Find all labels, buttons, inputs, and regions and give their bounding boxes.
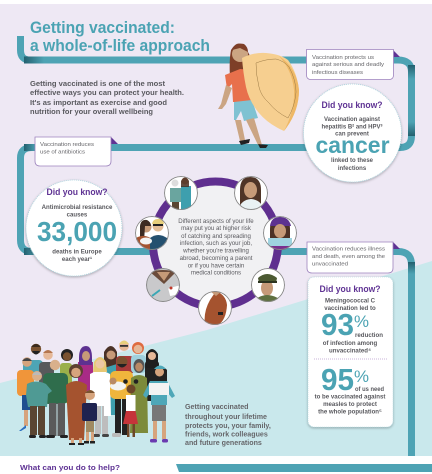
stat: 95%: of us need bbox=[355, 386, 384, 393]
closing text: protects you, your family, bbox=[185, 422, 271, 430]
did you know: cancer bbox=[304, 84, 402, 182]
ring text: medical conditions bbox=[191, 270, 241, 276]
title bbox=[30, 19, 210, 55]
did you know: 33,000: deaths in Europe bbox=[52, 248, 102, 256]
back row bbox=[23, 340, 159, 415]
stat: 95%: measles to protect bbox=[323, 401, 377, 408]
ring text: or if you have certain bbox=[188, 262, 244, 270]
ring of life stages bbox=[135, 176, 297, 326]
portrait: traveller bbox=[263, 216, 297, 252]
intro text: effective ways you can protect your health. bbox=[30, 88, 184, 97]
intro text bbox=[30, 79, 184, 116]
portrait: carer and older person bbox=[164, 176, 198, 212]
did you know: 33,000: causes bbox=[67, 212, 88, 218]
did you know card: Did you know? bbox=[320, 284, 381, 294]
ring text: may put you at higher risk bbox=[181, 225, 252, 232]
ring text: Different aspects of your life bbox=[178, 218, 254, 225]
callout: illness: Vaccination reduces illness bbox=[312, 246, 385, 252]
portrait: patient with medical card bbox=[146, 268, 181, 302]
did you know: 33,000: 33,000 bbox=[37, 216, 117, 247]
did you know card: vaccination led to bbox=[324, 305, 376, 312]
did you know: cancer: infections bbox=[338, 166, 367, 172]
stat: 93% bbox=[321, 307, 383, 354]
portrait: pregnant woman bbox=[198, 291, 232, 326]
stat: 95%: % bbox=[354, 367, 369, 386]
closing text: and future generations bbox=[185, 439, 262, 447]
title: Getting vaccinated: bbox=[30, 19, 175, 37]
callout: illness: unvaccinated bbox=[312, 262, 348, 268]
stat: 95%: the whole population⁵ bbox=[318, 408, 382, 416]
did you know: cancer: hepatitis B² and HPV³ bbox=[321, 124, 383, 130]
callout: protects: infectious diseases bbox=[312, 70, 363, 76]
stat: 95% bbox=[315, 362, 385, 416]
illustration: woman with shield bbox=[218, 43, 299, 148]
did you know: cancer: Vaccination against bbox=[324, 117, 380, 123]
stat: 95%: to be vaccinated against bbox=[315, 394, 385, 400]
did you know: 33,000: Did you know? bbox=[46, 187, 108, 197]
did you know: 33,000: Antimicrobial resistance bbox=[42, 204, 113, 211]
closing text bbox=[185, 403, 271, 447]
intro text: It's as important as exercise and good bbox=[30, 98, 167, 107]
portrait: soldier bbox=[251, 268, 285, 303]
did you know: cancer: Did you know? bbox=[322, 100, 383, 110]
intro text: Getting vaccinated is one of the most bbox=[30, 79, 166, 88]
ring text: of catching and spreading bbox=[181, 233, 251, 240]
did you know: cancer: linked to these bbox=[331, 158, 374, 164]
closing text: throughout your lifetime bbox=[185, 413, 267, 421]
closing text: friends, work colleagues bbox=[185, 430, 268, 438]
ring text: abroad, becoming a parent bbox=[180, 255, 253, 262]
stat: 93%: % bbox=[354, 312, 369, 331]
did you know card bbox=[308, 277, 393, 427]
did you know: 33,000 bbox=[26, 180, 122, 276]
ring text bbox=[178, 218, 254, 276]
icon: shield bbox=[242, 53, 299, 131]
title: a whole-of-life approach bbox=[30, 37, 210, 55]
portrait: doctor bbox=[234, 176, 268, 211]
did you know: cancer: can prevent bbox=[335, 132, 369, 138]
stat: 93%: of infection among bbox=[323, 340, 378, 347]
illustration: crowd of people bbox=[17, 340, 175, 445]
ring text: infection, such as your job, bbox=[180, 240, 252, 247]
callout: protects: against serious and deadly bbox=[312, 62, 384, 68]
callout: antibiotics bbox=[35, 137, 118, 166]
callout: antibiotics: Vaccination reduces bbox=[40, 142, 94, 148]
callout: antibiotics: use of antibiotics bbox=[40, 150, 85, 156]
footer heading: What can you do to help? bbox=[20, 463, 120, 472]
callout: illness: and death, even among the bbox=[312, 254, 385, 260]
stat: 93%: reduction bbox=[355, 332, 383, 339]
did you know card: Meningococcal C bbox=[325, 298, 376, 304]
callout: illness bbox=[307, 242, 400, 273]
did you know: cancer: cancer bbox=[316, 132, 390, 158]
stat: 93%: 93 bbox=[321, 307, 354, 342]
stat: 93%: unvaccinated⁴ bbox=[329, 348, 371, 354]
did you know: 33,000: each year¹ bbox=[62, 256, 92, 263]
stat: 95%: 95 bbox=[321, 362, 354, 397]
footer ribbon bbox=[176, 464, 432, 472]
callout: protects bbox=[306, 50, 400, 80]
portrait: new parents with baby bbox=[135, 216, 169, 251]
ring text: whether you're travelling bbox=[182, 248, 249, 254]
intro text: nutrition for your overall wellbeing bbox=[30, 107, 153, 116]
closing text: Getting vaccinated bbox=[185, 403, 248, 411]
front row bbox=[17, 356, 175, 445]
callout: protects: Vaccination protects us bbox=[312, 55, 374, 61]
